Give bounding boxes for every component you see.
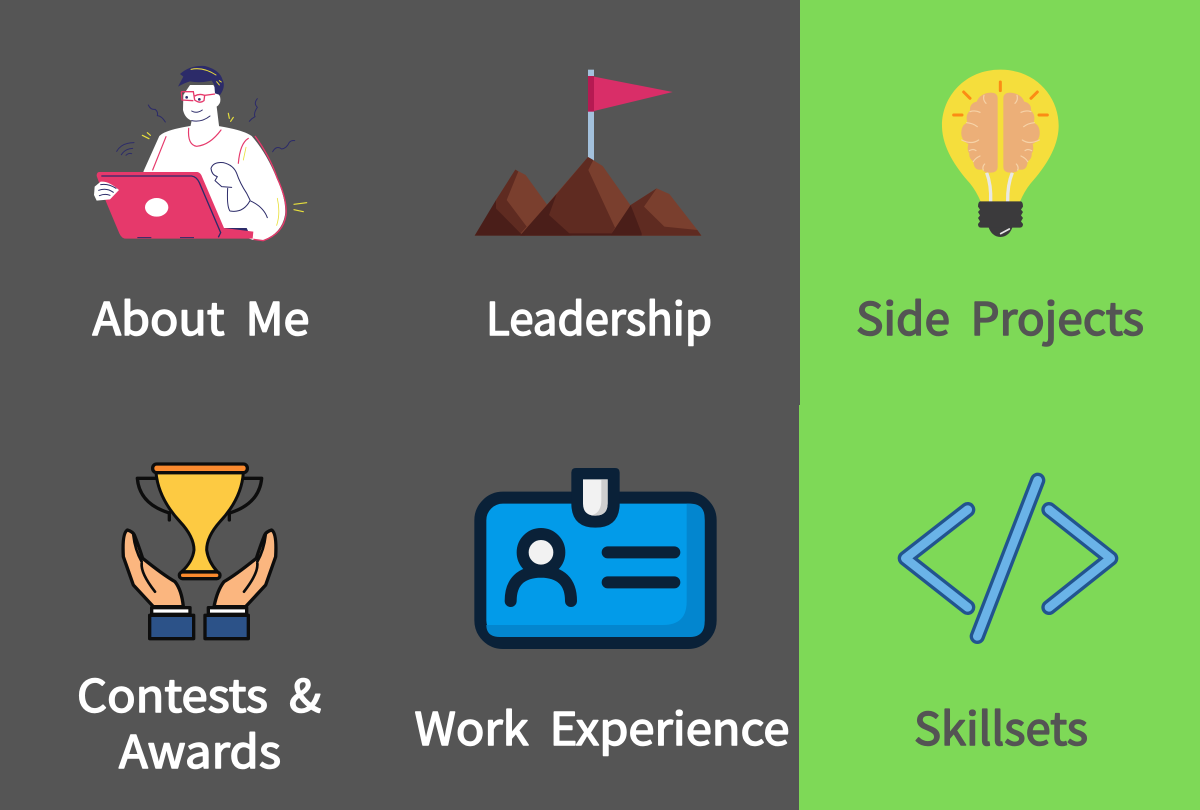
- heading: Contests & Awards: [77, 660, 321, 781]
- panel: Leadership: [475, 70, 712, 348]
- heading: Leadership: Leadership: [486, 283, 712, 348]
- icon: light bulb with brain: [942, 70, 1059, 237]
- icon: flag on mountains: [475, 70, 701, 236]
- heading: Skillsets: Skillsets: [914, 693, 1088, 758]
- heading: About Me: About Me: [92, 283, 310, 348]
- panel: Side Projects: [856, 70, 1144, 348]
- panel: Contests & Awards: [77, 464, 321, 781]
- icon: ID badge: [480, 468, 711, 643]
- icon: man with laptop: [94, 66, 307, 241]
- heading: Contests & Awards: Awards: [119, 716, 281, 781]
- icon: code brackets: [905, 480, 1111, 636]
- panel: About Me: [92, 66, 310, 348]
- icon: trophy held by hands: [123, 464, 276, 639]
- panel: Work Experience: [414, 468, 790, 758]
- heading: Contests & Awards: Contests &: [77, 660, 321, 725]
- panel: Skillsets: [905, 480, 1111, 758]
- heading: Work Experience: Work Experience: [414, 693, 790, 758]
- heading: Side Projects: Side Projects: [856, 283, 1144, 348]
